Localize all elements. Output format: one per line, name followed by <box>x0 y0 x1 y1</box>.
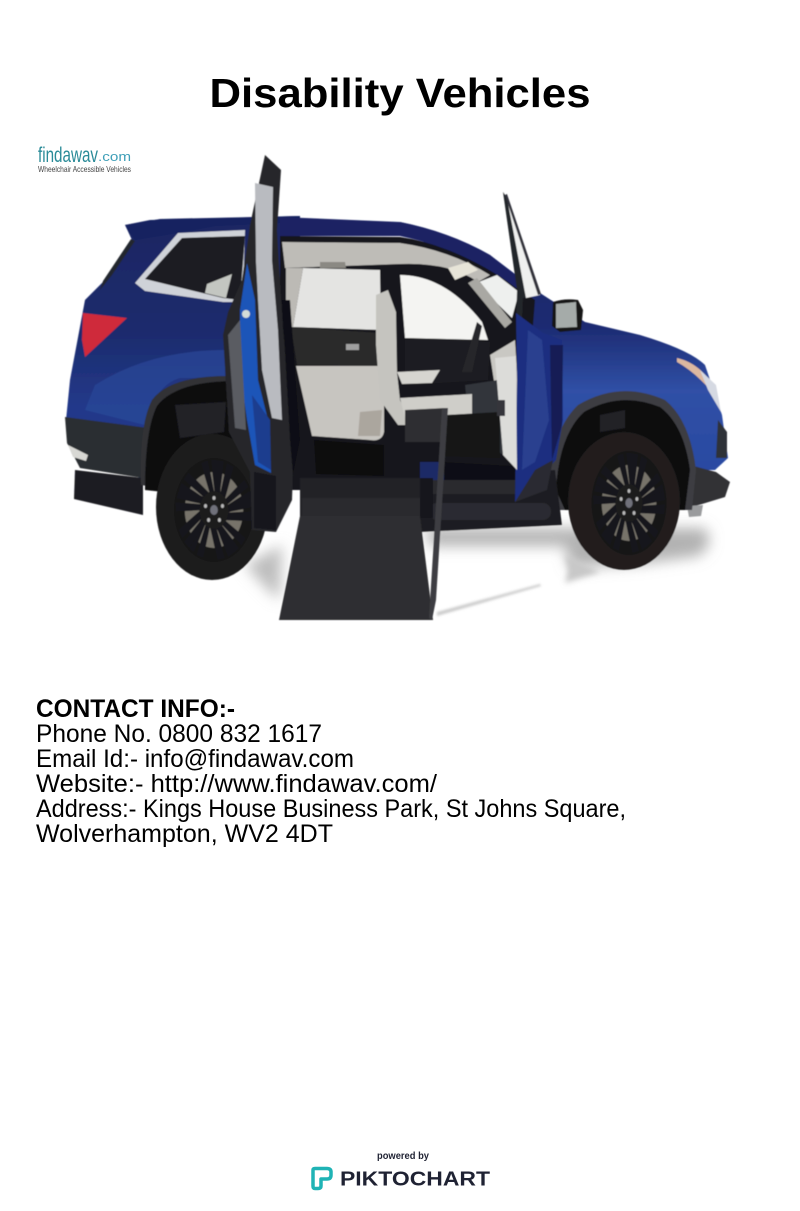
contact information <box>36 695 626 848</box>
footer: powered by Piktochart: powered by <box>377 1151 429 1162</box>
logo: findawav: findawav <box>38 144 98 167</box>
website: Website:- http://www.findawav.com/ <box>36 770 437 798</box>
door panel <box>515 313 563 502</box>
icon: Piktochart logo <box>313 1168 331 1188</box>
side mirror <box>552 299 583 332</box>
email: Email Id:- info@findawav.com <box>36 745 354 773</box>
front bumper <box>687 465 730 517</box>
front side glass <box>400 275 488 340</box>
rear bumper <box>65 417 148 515</box>
open front door <box>495 192 563 502</box>
front body panel <box>400 222 728 470</box>
ground shadows <box>245 528 709 616</box>
rear roof highlight <box>125 216 300 240</box>
logo: findawav <box>38 144 131 174</box>
rear quarter window with chrome trim <box>135 230 245 302</box>
headlight <box>677 358 712 392</box>
footer: powered by Piktochart <box>313 1151 491 1190</box>
front wheel arch <box>548 391 696 510</box>
front seat cushion <box>400 394 472 418</box>
rear door trim dark <box>291 327 382 366</box>
wheelchair ramp <box>279 408 448 620</box>
grille <box>716 420 727 458</box>
side sill and step bar <box>420 462 562 532</box>
tail light <box>82 313 127 357</box>
illustration: wheelchair accessible vehicle <box>65 155 730 620</box>
front seat armrest <box>397 370 440 384</box>
rear wheel <box>156 434 268 580</box>
cabin opening <box>280 217 535 490</box>
front wheel <box>568 432 680 570</box>
logo: findawav: Wheelchair Accessible Vehicles <box>38 164 131 174</box>
dash <box>490 340 520 420</box>
open rear door <box>223 155 300 532</box>
logo: findawav: .com <box>98 149 131 164</box>
door window frame <box>503 192 528 420</box>
dashboard door dark <box>405 338 490 385</box>
footer: powered by Piktochart: PIKTOCHART <box>340 1168 491 1190</box>
floor well <box>314 440 384 476</box>
rear body highlight <box>85 350 225 425</box>
headliner <box>282 242 490 282</box>
rear door trim light <box>296 366 384 440</box>
rear pillar glass strip <box>100 239 135 290</box>
ramp rail <box>429 408 448 620</box>
title: Disability Vehicles <box>210 70 590 116</box>
contact heading: CONTACT INFO:- <box>36 695 235 723</box>
contact information: Wolverhampton, WV2 4DT <box>36 820 333 848</box>
roof blue strip <box>280 217 530 295</box>
rear wheel arch <box>141 376 240 500</box>
rear side glass <box>293 268 381 330</box>
seat base <box>405 408 445 442</box>
front seat back <box>376 290 412 425</box>
steering wheel <box>462 322 482 372</box>
rear body panel <box>66 216 300 480</box>
door inner panel <box>495 356 517 470</box>
address: Address:- Kings House Business Park, St Johns Square, <box>36 795 626 823</box>
phone: Phone No. 0800 832 1617 <box>36 720 322 748</box>
